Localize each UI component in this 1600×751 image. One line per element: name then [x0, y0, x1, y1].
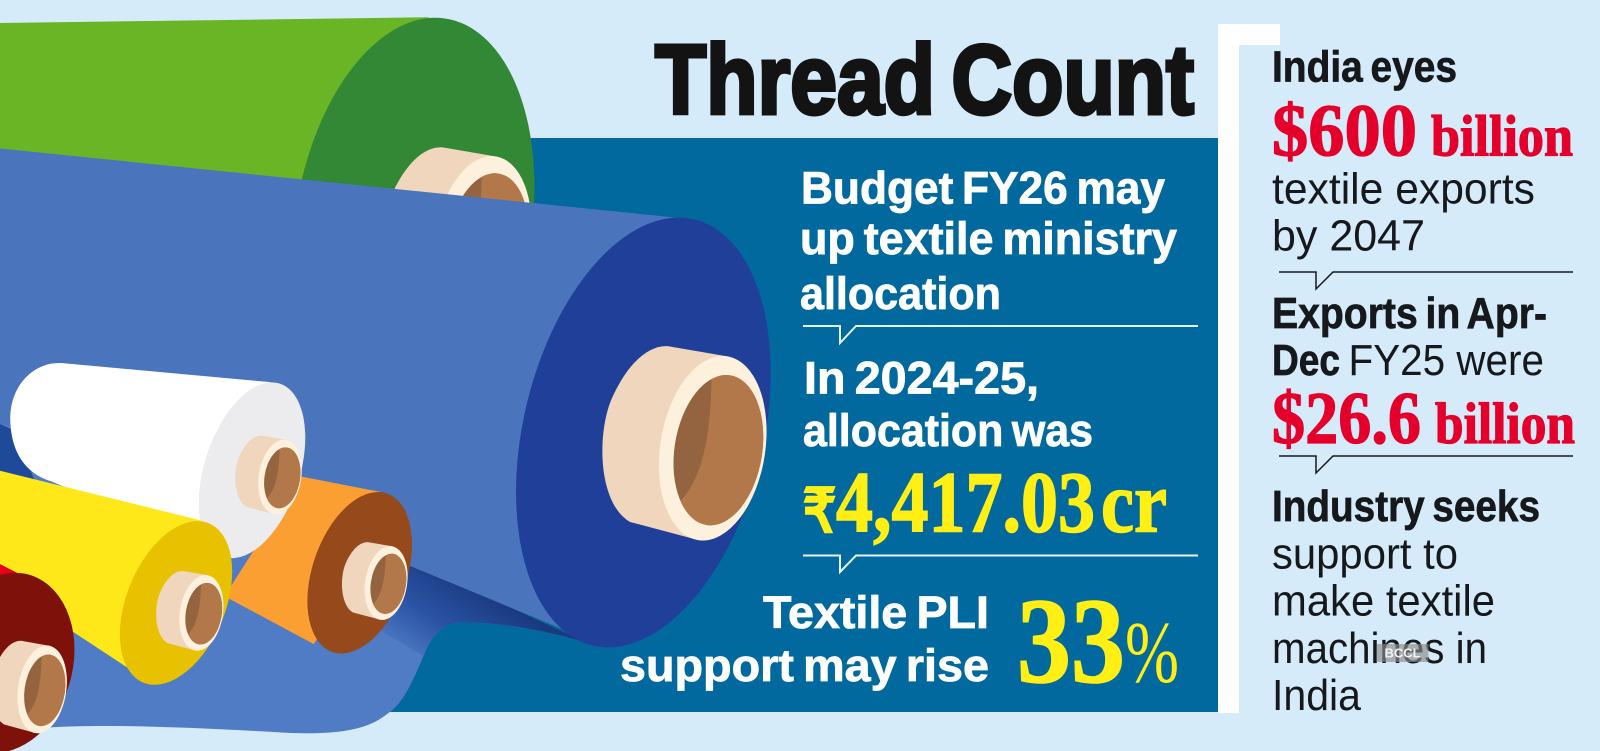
yellow roll	[0, 471, 254, 699]
text block: budget headline: allocation	[800, 268, 1001, 319]
stat: 600 billion: billion	[1431, 104, 1573, 168]
text block: 2024-25 allocation: In 2024-25,	[804, 352, 1039, 404]
text block: exports Apr-Dec: Exports in Apr-	[1272, 289, 1547, 338]
text block: industry seeks	[1272, 482, 1540, 720]
orange roll	[224, 477, 431, 665]
text block: 2024-25 allocation	[803, 352, 1093, 456]
green roll	[0, 3, 561, 447]
stat: 600 billion	[1272, 90, 1573, 172]
stat: 26.6 billion	[1272, 378, 1575, 460]
stat: 33 percent: %	[1125, 605, 1179, 702]
stat: 600 billion: $600	[1272, 90, 1417, 172]
blue roll	[0, 148, 810, 670]
white roll	[10, 363, 325, 570]
illustration: fabric rolls	[0, 3, 810, 751]
red roll	[0, 561, 92, 751]
stat: allocation amount: ₹	[803, 478, 836, 544]
text block: budget headline: Budget FY26 may	[801, 162, 1165, 214]
stat: 26.6 billion: billion	[1435, 391, 1575, 456]
watermark: BCCL: BCCL	[1384, 646, 1421, 660]
divider: speech notch	[1279, 272, 1573, 289]
stat: 33 percent: 33	[1017, 574, 1125, 709]
divider: speech notch	[803, 326, 1198, 343]
text block: exports Apr-Dec: Dec	[1272, 336, 1340, 385]
text block: textile exports: textile exports	[1272, 164, 1535, 214]
text block: textile PLI	[620, 587, 989, 691]
text block: textile PLI: support may rise	[620, 640, 989, 691]
text block: textile exports	[1272, 164, 1535, 260]
text block: 2024-25 allocation: allocation was	[803, 405, 1093, 456]
divider: speech notch	[803, 556, 1198, 572]
text block: budget headline: up textile ministry	[800, 213, 1177, 264]
panel: blue background	[380, 138, 1218, 712]
stat: allocation amount: cr	[1101, 454, 1167, 550]
text block: industry seeks: support to	[1272, 530, 1458, 578]
text block: exports Apr-Dec: FY25 were	[1348, 336, 1544, 385]
text block: industry seeks: Industry seeks	[1272, 482, 1540, 531]
white bracket	[1218, 24, 1280, 713]
text block: industry seeks: machines in	[1272, 624, 1487, 673]
text block: textile PLI: Textile PLI	[763, 587, 989, 638]
text block: textile exports: by 2047	[1272, 212, 1425, 260]
text block: industry seeks: India	[1272, 671, 1361, 720]
text block: budget headline	[800, 162, 1177, 319]
text block: industry seeks: make textile	[1272, 576, 1495, 626]
text block: India eyes: India eyes	[1272, 42, 1457, 92]
title: Thread Count	[655, 24, 1194, 134]
watermark: BCCL	[1376, 644, 1428, 662]
stat: allocation amount: 4,417.03	[836, 454, 1095, 550]
text block: exports Apr-Dec	[1272, 289, 1547, 385]
stat: 26.6 billion: $26.6	[1272, 378, 1421, 460]
fabric sheet	[0, 424, 587, 733]
divider: speech notch	[1279, 456, 1573, 473]
